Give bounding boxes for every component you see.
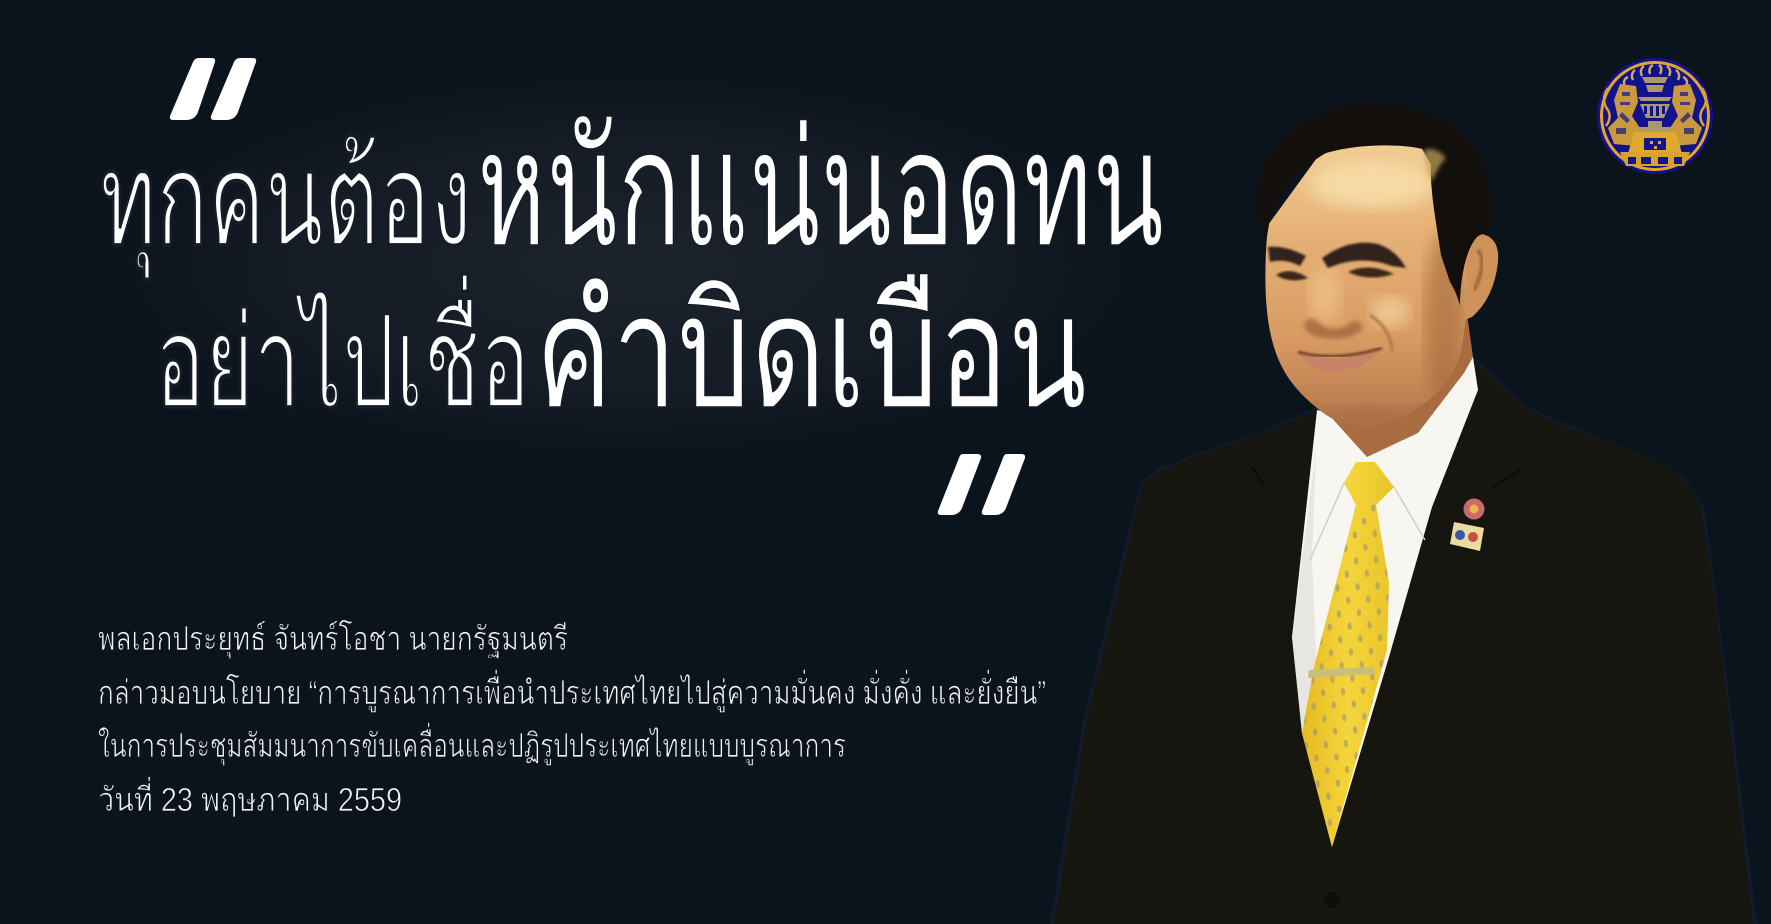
shirt shadow xyxy=(1292,450,1318,733)
seal: left lion xyxy=(1604,84,1640,146)
person portrait xyxy=(1050,103,1757,924)
collar line xyxy=(1310,483,1425,560)
mouth xyxy=(1298,348,1382,372)
headline line 1 light: ทุกคนต้อง xyxy=(100,126,472,280)
hair xyxy=(1257,103,1493,306)
speaker name: พลเอกประยุทธ์ จันทร์โอชา นายกรัฐมนตรี xyxy=(98,619,568,660)
shirt xyxy=(1292,357,1478,847)
neck xyxy=(1312,300,1473,457)
face xyxy=(1265,140,1467,426)
nose xyxy=(1303,319,1362,339)
left eyebrow xyxy=(1268,247,1306,266)
tie clip xyxy=(1308,667,1375,678)
event: ในการประชุมสัมมนาการขับเคลื่อนและปฏิรูปประเทศไทยแบบบูรณาการ xyxy=(98,723,846,767)
cheek crease xyxy=(1370,315,1392,352)
jacket button xyxy=(1324,892,1340,908)
speech title: กล่าวมอบนโยบาย “การบูรณาการเพื่อนำประเทศไทยไปสู่ความมั่นคง มั่งคั่ง และยั่งยืน” xyxy=(98,670,1046,713)
headline line 1 emphasis: หนักแน่นอดทน xyxy=(477,99,1164,280)
right eyebrow xyxy=(1322,243,1406,268)
headline line 2 emphasis: คำบิดเบือน xyxy=(535,263,1087,441)
headline line 2 light: อย่าไปเชื่อ xyxy=(155,273,530,435)
face shading xyxy=(1306,158,1466,424)
suit jacket xyxy=(1054,360,1753,924)
quote mark: opening xyxy=(170,58,256,120)
hair highlight xyxy=(1424,149,1446,182)
tie xyxy=(1302,462,1394,847)
headline quote xyxy=(100,99,1164,441)
lapel pin: square xyxy=(1450,522,1484,551)
icon: government seal xyxy=(1597,58,1713,174)
seal: pedestal xyxy=(1628,132,1682,154)
seal: right lion xyxy=(1670,84,1706,146)
suit halo xyxy=(1050,358,1757,924)
lapel lines xyxy=(1252,467,1520,487)
seal: base xyxy=(1620,152,1690,166)
lapel pin: round xyxy=(1464,498,1484,520)
left eye xyxy=(1276,271,1308,280)
right eye xyxy=(1348,267,1394,278)
background glow xyxy=(30,40,1230,490)
quote mark: closing xyxy=(938,454,1025,515)
seal: offering bowl xyxy=(1638,77,1672,132)
attribution text block xyxy=(98,619,1046,818)
seal: flame crown xyxy=(1624,65,1687,86)
tie pattern xyxy=(1302,505,1389,847)
date: วันที่ 23 พฤษภาคม 2559 xyxy=(98,777,402,818)
ear xyxy=(1450,234,1498,325)
